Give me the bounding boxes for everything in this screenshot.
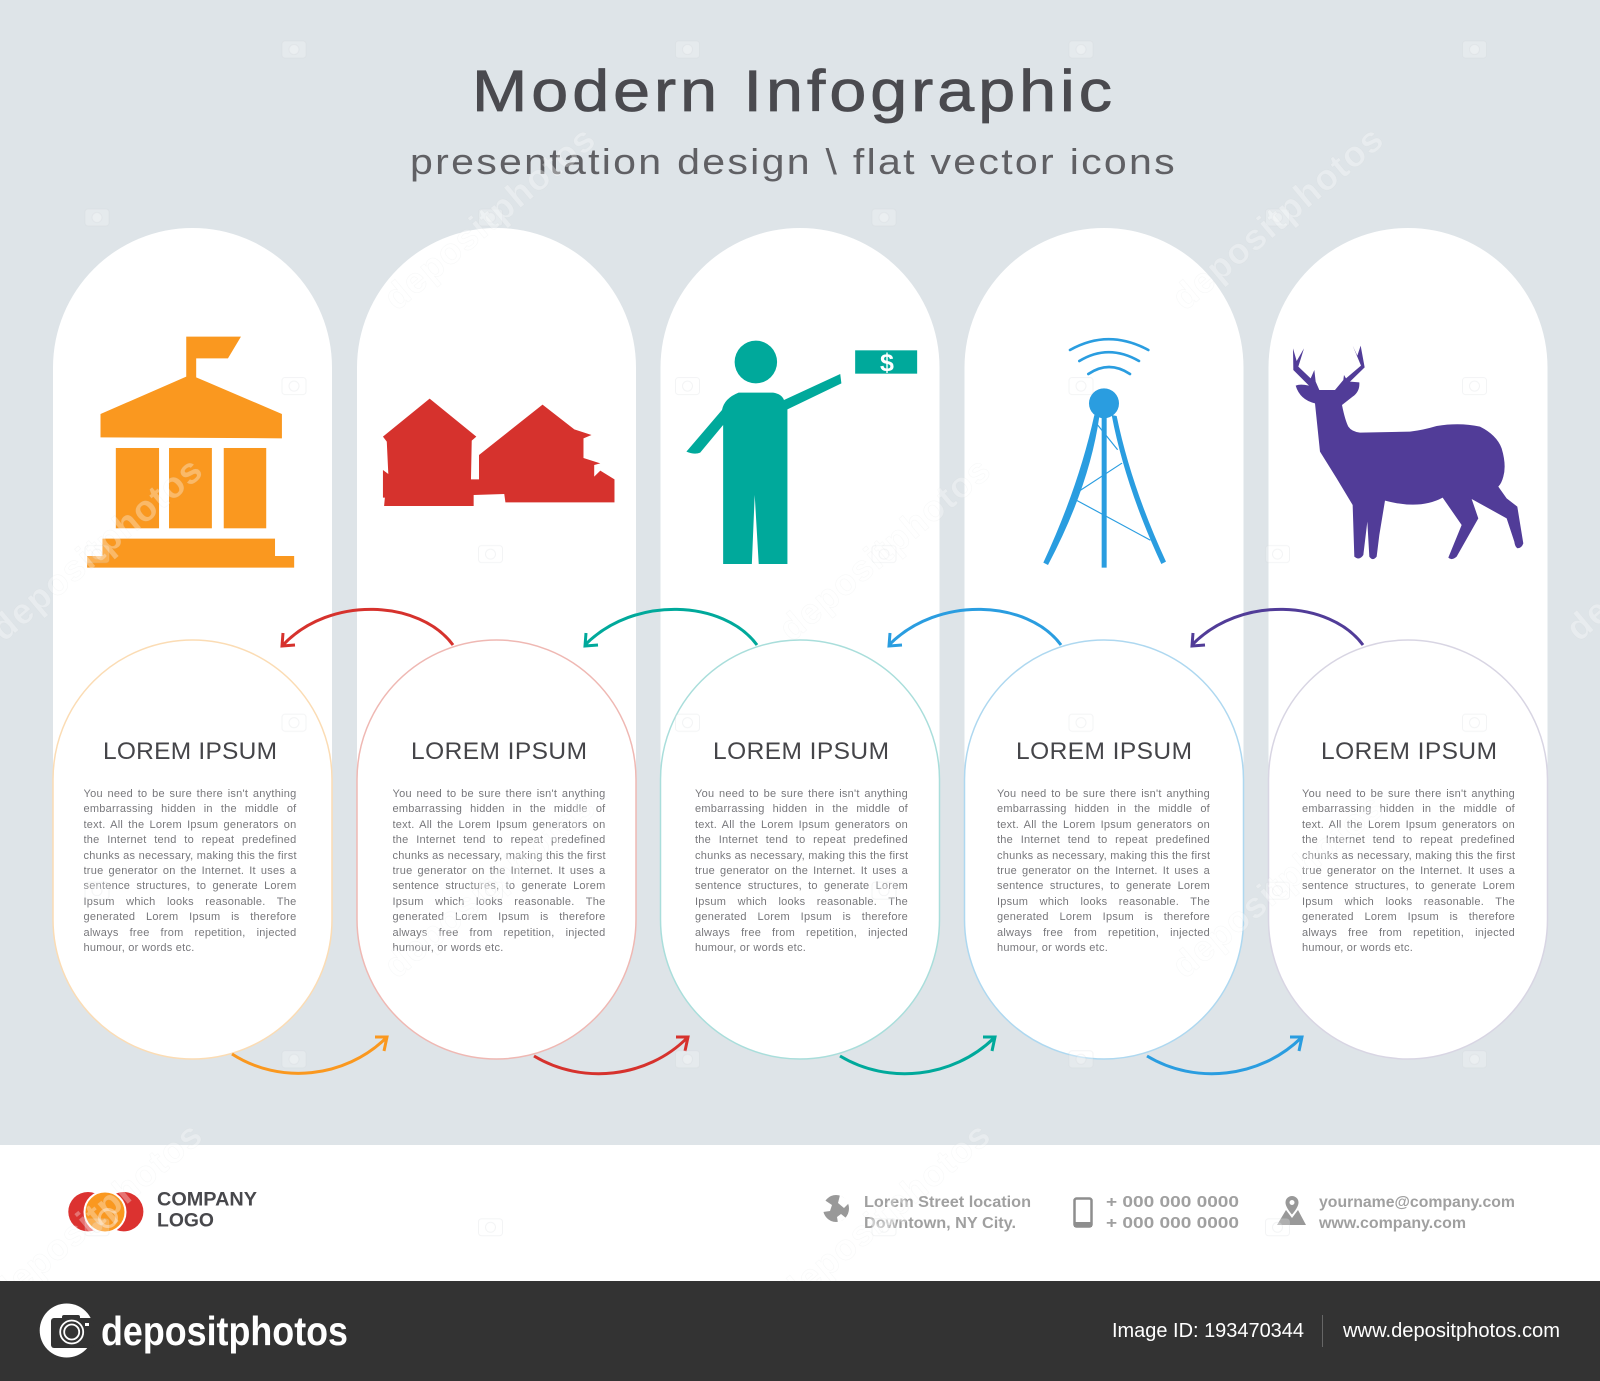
pill background xyxy=(964,228,1244,850)
body text: true generator on the Internet. It uses a xyxy=(84,865,296,877)
body text: the Internet tend to repeat predefined xyxy=(392,834,606,846)
body text: text. All the Lorem Ipsum generators on xyxy=(392,819,606,831)
body text: true generator on the Internet. It uses a xyxy=(1302,865,1515,877)
body text: embarrassing hidden in the middle of xyxy=(392,803,606,815)
body text: always free from repetition, injected xyxy=(997,927,1210,939)
arrows: top row pointing left xyxy=(282,609,1363,646)
body text: generated Lorem Ipsum is therefore xyxy=(997,911,1210,923)
body text: sentence structures, to generate Lorem xyxy=(1302,880,1515,892)
body text: humour, or words etc. xyxy=(1302,942,1413,954)
body text: embarrassing hidden in the middle of xyxy=(695,803,908,815)
text oval xyxy=(660,640,940,1059)
body text: true generator on the Internet. It uses a xyxy=(997,865,1210,877)
address: Downtown, NY City. xyxy=(864,1215,1016,1232)
icon: phone xyxy=(1074,1198,1092,1227)
body text: chunks as necessary, making this the first xyxy=(84,850,297,862)
logo text: LOGO xyxy=(157,1210,214,1232)
body text xyxy=(392,787,612,962)
watermark overlay: depositphotos xyxy=(1164,786,1391,986)
body text: always free from repetition, injected xyxy=(695,927,908,939)
body text: chunks as necessary, making this the first xyxy=(392,850,606,862)
body text: Ipsum which looks reasonable. The xyxy=(392,896,606,908)
watermark overlay: depositphotos xyxy=(376,118,603,318)
footer background xyxy=(0,1145,1600,1281)
watermark overlay: depositphotos xyxy=(376,786,603,986)
icon: person with banknote xyxy=(686,341,917,564)
body text: generated Lorem Ipsum is therefore xyxy=(1302,911,1515,923)
panel: deer xyxy=(1268,228,1548,1059)
body text: humour, or words etc. xyxy=(695,942,806,954)
icon: globe xyxy=(823,1195,850,1223)
heading: LOREM IPSUM xyxy=(1016,738,1192,765)
arrow: red xyxy=(282,609,453,646)
body text: true generator on the Internet. It uses a xyxy=(695,865,908,877)
body text: the Internet tend to repeat predefined xyxy=(84,834,296,846)
body text: chunks as necessary, making this the first xyxy=(1302,850,1515,862)
logo text xyxy=(157,1190,257,1232)
body text: text. All the Lorem Ipsum generators on xyxy=(84,819,296,831)
depositphotos wordmark: depositphotos xyxy=(101,1308,348,1354)
arrow: purple xyxy=(1192,609,1363,646)
body text: sentence structures, to generate Lorem xyxy=(695,880,908,892)
logo text: COMPANY xyxy=(157,1190,257,1210)
icon: bank xyxy=(87,337,294,568)
body text: embarrassing hidden in the middle of xyxy=(997,803,1210,815)
body text: text. All the Lorem Ipsum generators on xyxy=(695,819,908,831)
icon: antenna tower xyxy=(1043,339,1166,568)
body text: embarrassing hidden in the middle of xyxy=(1302,803,1515,815)
body text: Ipsum which looks reasonable. The xyxy=(997,896,1210,908)
arrow: blue xyxy=(889,609,1061,646)
image id: Image ID: 193470344 xyxy=(1112,1320,1304,1342)
address: Lorem Street location xyxy=(864,1194,1031,1211)
pill background xyxy=(1268,228,1548,850)
panel: bank xyxy=(53,228,332,1059)
body text: generated Lorem Ipsum is therefore xyxy=(84,911,296,923)
bar background xyxy=(0,1281,1600,1381)
panel: houses xyxy=(357,228,636,1059)
text oval xyxy=(357,640,636,1059)
text oval xyxy=(53,640,332,1059)
body text: chunks as necessary, making this the first xyxy=(695,850,908,862)
arrows: bottom row pointing right xyxy=(232,1037,1302,1074)
watermark overlay: depositphotos xyxy=(771,449,998,649)
heading: LOREM IPSUM xyxy=(103,738,277,765)
body text: the Internet tend to repeat predefined xyxy=(1302,834,1515,846)
body text: text. All the Lorem Ipsum generators on xyxy=(997,819,1210,831)
body text: embarrassing hidden in the middle of xyxy=(84,803,296,815)
icon: person with banknote: $ xyxy=(880,349,894,377)
body text: Ipsum which looks reasonable. The xyxy=(1302,896,1515,908)
body text: Ipsum which looks reasonable. The xyxy=(695,896,908,908)
heading: LOREM IPSUM xyxy=(713,738,889,765)
email and website: yourname@company.com xyxy=(1319,1194,1515,1211)
heading: LOREM IPSUM xyxy=(411,738,587,765)
pill background xyxy=(660,228,940,850)
phone numbers: + 000 000 0000 xyxy=(1106,1215,1239,1232)
arrow: orange xyxy=(232,1037,387,1073)
body text: chunks as necessary, making this the first xyxy=(997,850,1210,862)
panel: antenna tower xyxy=(964,228,1244,1059)
pill background xyxy=(357,228,636,850)
body text: text. All the Lorem Ipsum generators on xyxy=(1302,819,1515,831)
panel: person with money xyxy=(660,228,940,1059)
logo mark xyxy=(68,1192,143,1232)
email and website: www.company.com xyxy=(1318,1215,1466,1232)
heading: LOREM IPSUM xyxy=(1321,738,1497,765)
subtitle: presentation design \ flat vector icons xyxy=(410,141,1177,182)
body text: sentence structures, to generate Lorem xyxy=(997,880,1210,892)
body text: always free from repetition, injected xyxy=(392,927,606,939)
text oval xyxy=(1268,640,1548,1059)
arrow: teal xyxy=(585,609,757,646)
body text: humour, or words etc. xyxy=(84,942,195,954)
body text: always free from repetition, injected xyxy=(1302,927,1515,939)
body text xyxy=(695,787,915,962)
arrow: teal xyxy=(840,1037,995,1074)
body text: the Internet tend to repeat predefined xyxy=(997,834,1210,846)
body text: Ipsum which looks reasonable. The xyxy=(84,896,296,908)
body text xyxy=(1302,787,1522,962)
body text xyxy=(997,787,1217,962)
website: www.depositphotos.com xyxy=(1342,1320,1560,1342)
footer xyxy=(0,1145,1600,1281)
arrow: red xyxy=(534,1037,688,1074)
phone numbers xyxy=(1106,1194,1239,1232)
body text: true generator on the Internet. It uses a xyxy=(392,865,606,877)
body text: the Internet tend to repeat predefined xyxy=(695,834,908,846)
text oval xyxy=(964,640,1244,1059)
body text: You need to be sure there isn't anything xyxy=(695,788,908,800)
title: Modern Infographic xyxy=(472,59,1116,124)
body text: humour, or words etc. xyxy=(392,942,504,954)
credit bar xyxy=(0,1281,1600,1381)
body text xyxy=(84,787,304,962)
body text: You need to be sure there isn't anything xyxy=(997,788,1210,800)
body text: sentence structures, to generate Lorem xyxy=(392,880,606,892)
icon: map pin xyxy=(1277,1196,1306,1225)
body text: You need to be sure there isn't anything xyxy=(84,788,296,800)
body text: always free from repetition, injected xyxy=(84,927,296,939)
body text: humour, or words etc. xyxy=(997,942,1108,954)
icon: deer xyxy=(1293,346,1523,559)
arrow: blue xyxy=(1147,1037,1302,1074)
pill background xyxy=(53,228,332,850)
body text: You need to be sure there isn't anything xyxy=(392,788,606,800)
body text: sentence structures, to generate Lorem xyxy=(84,880,296,892)
body text: generated Lorem Ipsum is therefore xyxy=(392,911,606,923)
watermark overlay: depositphotos xyxy=(1164,118,1391,318)
email and website xyxy=(1318,1194,1515,1232)
address xyxy=(864,1194,1031,1232)
body text: You need to be sure there isn't anything xyxy=(1302,788,1515,800)
body text: generated Lorem Ipsum is therefore xyxy=(695,911,908,923)
depositphotos logo mark xyxy=(40,1304,94,1358)
icon: houses xyxy=(383,399,614,506)
watermark overlay: depositphotos xyxy=(771,1114,998,1314)
phone numbers: + 000 000 0000 xyxy=(1106,1194,1239,1211)
